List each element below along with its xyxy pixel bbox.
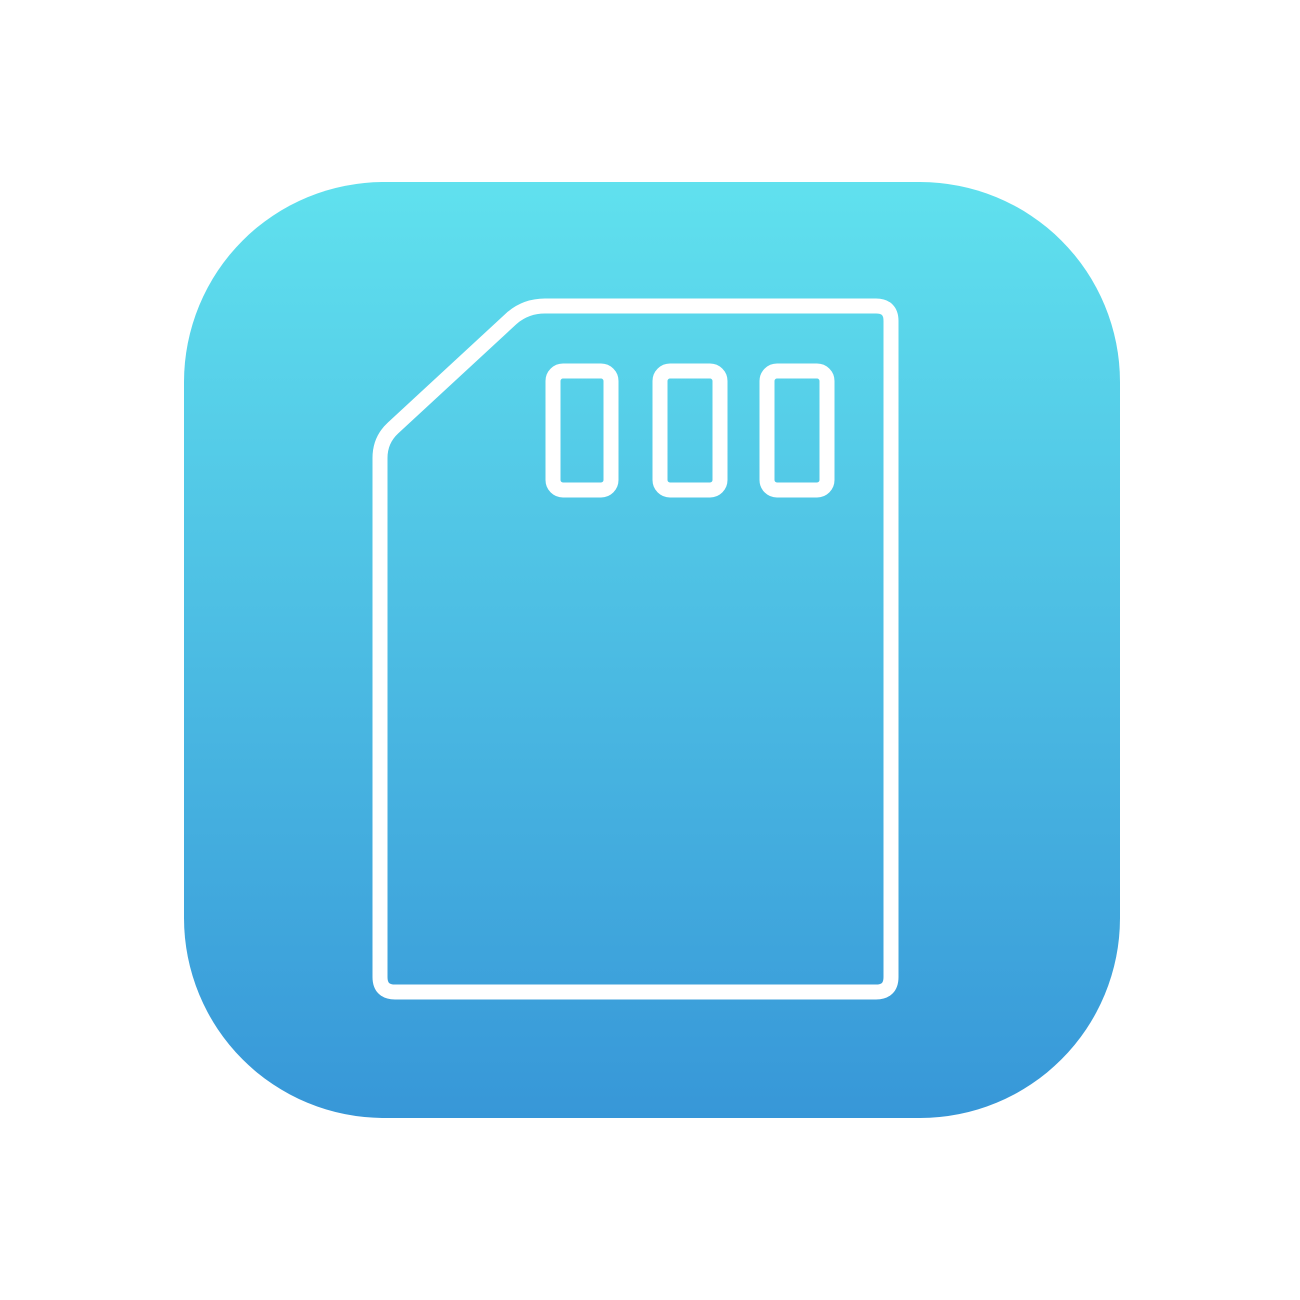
icon: sd card outline	[380, 306, 891, 992]
panel: rounded square background	[184, 182, 1120, 1118]
icon: contacts	[553, 371, 827, 490]
